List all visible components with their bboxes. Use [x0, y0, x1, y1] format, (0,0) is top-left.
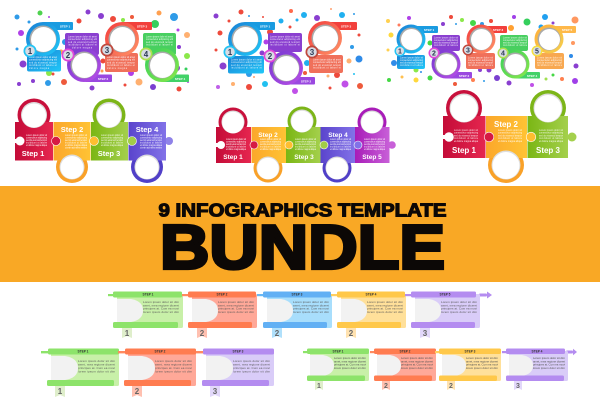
ribbon: step 3: lorem ipsum dolor sit dim — [233, 370, 271, 374]
ribbon: step 3: 2 — [449, 383, 453, 390]
step 2 purple — [428, 35, 472, 78]
piece: step 3: incididunt ut labore — [101, 142, 124, 144]
piece: step 3: et dolore magna aliqua — [101, 144, 124, 147]
step 3 red — [462, 24, 507, 69]
ribbon: step 4: STEP 4 — [366, 293, 377, 297]
ribbon: step 1: principes at. Cum ea movi — [334, 363, 366, 367]
piece: step 3: Step 3 — [536, 146, 561, 155]
ribbon: step 3: 3 — [213, 387, 218, 396]
ribbon: step 2: lorem ipsum dolor sit dim — [401, 366, 434, 370]
ribbon: step 5 with arrow: 3 — [423, 329, 428, 338]
step 2 purple: incididunt ut labore et — [270, 44, 300, 47]
piece: step 3 — [90, 98, 128, 160]
piece: step 3: consectetur adipiscing — [295, 140, 317, 144]
piece: step 4 — [320, 127, 355, 182]
piece: step 1 — [216, 108, 251, 163]
step 1 blue: consectetur adipiscing elit — [29, 59, 57, 62]
step 4 green — [498, 35, 540, 78]
ribbon: step 1: STEP 1 — [333, 349, 344, 353]
piece: step 5: incididunt ut labore — [364, 146, 386, 148]
piece: step 1: Step 1 — [452, 146, 477, 155]
piece: step 3: consectetur adipiscing — [539, 132, 564, 135]
ribbon: step 3: STEP 3 — [233, 350, 244, 354]
ribbon: step 4: 2 — [349, 329, 354, 338]
step 3 red: STEP 3 — [341, 24, 351, 28]
ribbon: step 2 — [182, 292, 257, 338]
ribbon: step 2: Lorem ipsum dolor sit dim — [155, 359, 193, 363]
step 1 blue — [24, 22, 73, 72]
step 2 purple: STEP 2 — [98, 77, 108, 81]
step 5 orange: STEP 5 — [562, 28, 572, 32]
step 5 orange — [532, 24, 576, 69]
step 1 blue: consectetur adipiscing elit — [231, 61, 262, 64]
ribbon: step 5 with arrow: STEP 5 — [440, 293, 451, 297]
ribbon: step 4 with arrow: 3 — [516, 383, 520, 390]
piece: step 2: et dolore magna aliqua — [260, 148, 282, 151]
step 1 blue: incididunt ut labore et — [29, 64, 57, 67]
panel: puzzle with 5 steps — [216, 106, 396, 182]
ribbon: step 2: Lorem ipsum dolor sit dim — [218, 300, 255, 304]
piece: step 2: et dolore magna aliqua — [65, 144, 88, 147]
ribbon: step 4: Lorem ipsum dolor sit dim — [367, 300, 404, 304]
ribbon: step 2: STEP 2 — [400, 349, 411, 353]
ribbon: step 1 — [108, 292, 183, 338]
piece: step 2: consectetur adipiscing — [260, 140, 282, 144]
confetti dots — [214, 8, 363, 94]
piece: step 3: Step 3 — [294, 154, 314, 161]
piece: step 5 — [354, 108, 396, 163]
ribbon: step 3: principes at. Cum ea movi — [233, 366, 270, 370]
ribbon: step 1: STEP 1 — [143, 293, 154, 297]
step 5 orange: 5 — [535, 48, 539, 56]
step 2 purple: incididunt ut labore — [434, 44, 459, 47]
step 1 blue: sed do eiusmod tempor — [231, 64, 262, 67]
piece: step 2: incididunt ut labore — [498, 137, 523, 140]
piece: step 2: et dolore magna aliqua — [498, 140, 523, 143]
piece: step 2: Step 2 — [258, 132, 278, 139]
piece: step 2: incididunt ut labore — [260, 146, 282, 148]
piece: step 1: Step 1 — [22, 149, 44, 158]
step 1 blue: STEP 1 — [424, 28, 434, 32]
step 2 purple: Lorem ipsum dolor sit amet — [68, 36, 97, 38]
piece: step 1 — [443, 90, 486, 158]
step 1 blue — [224, 22, 275, 74]
ribbon: step 1: STEP 1 — [78, 350, 89, 354]
step 5 orange: sed do eiusmod tempor — [537, 62, 562, 64]
piece: step 3: sed do eiusmod tempor — [101, 139, 123, 142]
piece: step 4: incididunt ut labore — [140, 142, 163, 144]
ribbon: step 3 — [257, 292, 332, 338]
piece: step 3: Lorem ipsum dolor sit — [539, 129, 563, 132]
piece: step 4 — [128, 122, 173, 183]
step 3 red — [306, 21, 357, 73]
ribbon: step 3: amet, mea regione diceret — [233, 362, 270, 366]
piece: step 2 — [250, 127, 286, 182]
ribbon: step 3: principes at. Cum ea movi — [466, 363, 498, 367]
ribbon: step 4: principes at. Cum ea movi — [367, 307, 403, 311]
step 4 green: sed do eiusmod tempor — [146, 41, 173, 44]
step 1 blue: Lorem ipsum dolor sit amet — [29, 56, 57, 59]
panel: ribbon row with 3 steps — [41, 348, 274, 397]
step 1 blue: 1 — [228, 48, 233, 57]
piece: step 4: ut enim ad minim veniam — [140, 146, 162, 150]
step 2 purple: STEP 2 — [459, 74, 469, 78]
piece: step 1: sed do eiusmod tempor — [26, 139, 47, 142]
panel: puzzle with 4 steps — [15, 98, 173, 183]
piece: step 4: et dolore magna aliqua — [140, 144, 163, 147]
piece: step 4: sed do eiusmod tempor — [330, 143, 351, 146]
piece: step 1: Lorem ipsum dolor sit — [26, 134, 47, 137]
ribbon: step 3 — [435, 348, 501, 390]
piece: step 1: incididunt ut labore — [454, 137, 479, 140]
orange banner — [0, 186, 600, 282]
piece: step 5: sed do eiusmod tempor — [364, 143, 385, 146]
piece: step 2: consectetur adipiscing — [65, 136, 88, 140]
piece: step 2: Step 2 — [61, 125, 83, 134]
piece: step 2: sed do eiusmod tempor — [498, 134, 522, 137]
piece: step 5: consectetur adipiscing — [364, 140, 386, 144]
step 2 purple: consectetur adipiscing elit — [270, 38, 300, 41]
step 2 purple: 2 — [268, 52, 273, 61]
panel: circle infographic with 5 steps — [386, 14, 578, 87]
ribbon: step 5 with arrow — [405, 292, 492, 338]
piece: step 2: Lorem ipsum dolor sit — [65, 134, 87, 137]
ribbon: step 1: amet, mea regione diceret — [334, 359, 366, 363]
ribbon: step 4 — [331, 292, 406, 338]
piece: step 3: et dolore magna aliqua — [539, 140, 564, 143]
confetti dots — [14, 10, 190, 92]
piece: step 1: sed do eiusmod tempor — [454, 134, 478, 137]
piece: step 2: Lorem ipsum dolor sit — [260, 138, 281, 141]
piece: step 2: sed do eiusmod tempor — [65, 139, 87, 142]
ribbon: step 2: 2 — [384, 383, 388, 390]
step 2 purple: sed do eiusmod tempor — [68, 41, 97, 44]
step 4 green: STEP 4 — [175, 77, 185, 81]
ribbon: step 4 with arrow: amet, mea regione diceret — [533, 359, 565, 363]
ribbon: step 1: amet, mea regione diceret — [78, 362, 115, 366]
ribbon: step 2 — [118, 348, 196, 397]
ribbon: step 3: STEP 3 — [292, 293, 303, 297]
piece: step 3: Lorem ipsum dolor sit — [101, 134, 123, 137]
ribbon: step 4: amet, mea regione diceret — [367, 303, 403, 307]
ribbon: step 1: lorem ipsum dolor sit dim — [143, 310, 180, 314]
step 4 green: incididunt ut labore et — [146, 44, 173, 47]
ribbon: step 3: principes at. Cum ea movi — [293, 307, 329, 311]
piece: step 1: consectetur adipiscing — [454, 132, 479, 135]
step 5 orange: incididunt ut labore — [537, 64, 563, 67]
ribbon: step 3: amet, mea regione diceret — [293, 303, 329, 307]
ribbon: step 2: 2 — [135, 387, 140, 396]
step 3 red: sed do eiusmod tempor — [107, 61, 135, 64]
step 3 red: consectetur adipiscing elit — [313, 61, 341, 64]
step 1 blue: dolore magna — [29, 67, 50, 70]
ribbon: step 2: 2 — [200, 329, 205, 338]
ribbon: step 4 with arrow: principes at. Cum ea movi — [533, 363, 565, 367]
step 3 red: dolore magna — [107, 67, 128, 70]
step 2 purple: 2 — [66, 51, 71, 60]
piece: step 2: consectetur adipiscing — [498, 132, 523, 135]
step 2 purple — [264, 33, 315, 85]
step 1 blue: STEP 1 — [60, 24, 70, 28]
panel: ribbon row with 5 steps — [108, 292, 492, 338]
piece: step 1: consectetur adipiscing — [26, 136, 48, 140]
ribbon: step 3: amet, mea regione diceret — [466, 359, 498, 363]
step 2 purple: 2 — [432, 50, 436, 58]
ribbon: step 4: lorem ipsum dolor sit dim — [367, 310, 404, 314]
step 3 red: sed do eiusmod tempor — [313, 64, 341, 67]
piece: step 2 — [484, 116, 527, 183]
step 3 red: 3 — [105, 46, 110, 55]
piece: step 2: sed do eiusmod tempor — [260, 143, 281, 146]
confetti dots — [386, 14, 578, 87]
ribbon: step 5 with arrow: principes at. Cum ea movi — [441, 307, 477, 311]
piece: step 4: Lorem ipsum dolor sit — [140, 134, 162, 137]
step 1 blue: Lorem ipsum dolor sit amet — [231, 58, 262, 62]
step 3 red: STEP 3 — [137, 24, 147, 28]
step 1 blue: incididunt ut labore — [400, 64, 424, 67]
panel: ribbon row with 4 steps — [303, 348, 577, 390]
ribbon: step 1: principes at. Cum ea movi — [78, 366, 115, 370]
ribbon: step 3: Lorem ipsum dolor sit dim — [293, 300, 330, 304]
piece: step 3: sed do eiusmod tempor — [539, 134, 563, 137]
step 2 purple: sed do eiusmod tempor — [270, 41, 300, 44]
ribbon: step 3 — [196, 348, 274, 397]
piece: step 4: incididunt ut labore — [330, 146, 352, 148]
ribbon: step 1: principes at. Cum ea movi — [143, 307, 179, 311]
subtitle: 9 infographics template: 9 INFOGRAPHICS TEMPLATE — [158, 200, 446, 220]
ribbon: step 1: lorem ipsum dolor sit dim — [78, 370, 116, 374]
piece: step 1: Lorem ipsum dolor sit — [226, 138, 246, 141]
ribbon: step 2: principes at. Cum ea movi — [218, 307, 254, 311]
piece: step 2: ut enim ad minim veniam — [65, 146, 87, 150]
piece: step 4: et dolore magna aliqua — [330, 148, 352, 151]
step 2 purple: sed do eiusmod tempor — [434, 42, 458, 44]
step 3 red: incididunt ut labore — [468, 64, 494, 67]
piece: step 4: consectetur adipiscing — [140, 136, 163, 140]
step 1 blue: sed do eiusmod tempor — [400, 62, 423, 64]
step 4 green: STEP 4 — [527, 74, 537, 78]
ribbon: step 1: 1 — [317, 383, 321, 390]
step 1 blue: Lorem ipsum dolor sit — [400, 56, 423, 60]
step 4 green: Lorem ipsum dolor sit amet — [146, 36, 173, 38]
piece: step 5: Step 5 — [362, 154, 382, 161]
step 1 blue — [394, 24, 438, 69]
step 3 red: 3 — [466, 48, 470, 54]
piece: step 3: consectetur adipiscing — [101, 136, 124, 140]
ribbon: step 1: Lorem ipsum dolor sit dim — [334, 356, 367, 360]
ribbon: step 1 — [41, 348, 119, 397]
step 1 blue: 1 — [398, 48, 402, 56]
ribbon: step 4 with arrow: Lorem ipsum dolor sit dim — [533, 356, 566, 360]
panel: circle infographic with 4 steps — [14, 10, 190, 92]
ribbon: step 4 with arrow: STEP 4 — [532, 349, 543, 353]
ribbon: step 2: lorem ipsum dolor sit dim — [155, 370, 193, 374]
step 1 blue: sed do eiusmod tempor — [29, 61, 57, 64]
piece: step 1: et dolore magna aliqua — [454, 140, 479, 143]
panel: circle infographic with 3 steps — [214, 8, 363, 94]
piece: step 3: sed do eiusmod tempor — [295, 143, 316, 146]
ribbon: step 4 with arrow — [502, 348, 577, 390]
piece: step 3: et dolore magna aliqua — [295, 148, 317, 151]
piece: step 2: Lorem ipsum dolor sit — [498, 129, 522, 132]
step 4 green: consectetur adipiscing — [503, 39, 528, 42]
piece: step 4: Lorem ipsum dolor sit — [330, 138, 351, 141]
ribbon: step 1: Lorem ipsum dolor sit dim — [78, 359, 116, 363]
step 3 red: consectetur adipiscing — [468, 59, 494, 62]
ribbon: step 5 with arrow: lorem ipsum dolor sit dim — [441, 310, 478, 314]
piece: step 1: sed do eiusmod tempor — [226, 143, 246, 146]
ribbon: step 2: lorem ipsum dolor sit dim — [218, 310, 255, 314]
step 4 green: 4 — [144, 50, 149, 59]
step 3 red: Lorem ipsum dolor sit amet — [313, 58, 341, 62]
ribbon: step 2: Lorem ipsum dolor sit dim — [401, 356, 434, 360]
ribbon: step 3: Lorem ipsum dolor sit dim — [233, 359, 271, 363]
ribbon: step 3: 2 — [275, 329, 280, 338]
ribbon: step 1: 1 — [125, 329, 130, 338]
ribbon: step 3: STEP 3 — [465, 349, 476, 353]
ribbon: step 2: principes at. Cum ea movi — [155, 366, 192, 370]
step 2 purple: Lorem ipsum dolor sit — [434, 36, 458, 40]
ribbon: step 2: principes at. Cum ea movi — [401, 363, 433, 367]
ribbon: step 3: lorem ipsum dolor sit dim — [293, 310, 330, 314]
step 4 green: Lorem ipsum dolor sit — [503, 36, 527, 40]
step 3 red — [100, 22, 152, 72]
ribbon: step 2: STEP 2 — [217, 293, 228, 297]
step 2 purple: consectetur adipiscing — [434, 39, 459, 42]
ribbon: step 2: amet, mea regione diceret — [155, 362, 192, 366]
ribbon: step 3: lorem ipsum dolor sit dim — [466, 366, 499, 370]
step 1 blue: 1 — [28, 47, 33, 56]
piece: step 1: Step 1 — [223, 154, 243, 161]
ribbon: step 5 with arrow: amet, mea regione diceret — [441, 303, 477, 307]
ribbon: step 1: amet, mea regione diceret — [143, 303, 179, 307]
piece: step 4: consectetur adipiscing — [330, 140, 352, 144]
step 4 green: 4 — [501, 50, 505, 58]
step 1 blue: incididunt ut labore et — [231, 67, 262, 70]
step 4 green — [140, 33, 189, 82]
piece: step 1: consectetur adipiscing — [226, 140, 247, 144]
step 3 red: incididunt ut labore et — [107, 64, 135, 67]
ribbon: step 4 with arrow: lorem ipsum dolor sit dim — [533, 366, 566, 370]
step 2 purple: dolore magna — [72, 46, 93, 49]
piece: step 2: Step 2 — [494, 120, 519, 129]
step 3 red: consectetur adipiscing elit — [107, 59, 135, 62]
piece: step 2: incididunt ut labore — [65, 142, 88, 144]
step 2 purple: STEP 2 — [301, 80, 311, 84]
piece: step 3: Lorem ipsum dolor sit — [295, 138, 316, 141]
piece: step 3: incididunt ut labore — [295, 146, 317, 148]
step 3 red: 3 — [310, 48, 315, 57]
step 3 red: Lorem ipsum dolor sit — [468, 56, 493, 60]
piece: step 1: incididunt ut labore — [26, 142, 48, 144]
step 1 blue: STEP 1 — [260, 24, 270, 28]
step 4 green: consectetur adipiscing elit — [146, 38, 173, 41]
ribbon: step 1: 1 — [58, 387, 63, 396]
piece: step 5: Lorem ipsum dolor sit — [364, 138, 385, 141]
piece: step 1: Lorem ipsum dolor sit — [454, 129, 478, 132]
title: bundle: BUNDLE — [160, 214, 445, 282]
step 2 purple: Lorem ipsum dolor sit amet — [270, 36, 300, 38]
step 1 blue: consectetur adipiscing — [400, 59, 424, 62]
step 3 red: incididunt ut labore et — [313, 67, 341, 70]
ribbon: step 3: Lorem ipsum dolor sit dim — [466, 356, 499, 360]
panel: puzzle with 3 steps — [443, 90, 576, 183]
ribbon: step 1: Lorem ipsum dolor sit dim — [143, 300, 180, 304]
piece: step 4: sed do eiusmod tempor — [140, 139, 162, 142]
step 5 orange: consectetur adipiscing — [537, 59, 563, 62]
ribbon: step 2 — [370, 348, 436, 390]
step 3 red: Lorem ipsum dolor sit amet — [107, 56, 135, 59]
step 4 green: sed do eiusmod tempor — [503, 42, 527, 44]
step 2 purple — [62, 33, 112, 82]
piece: step 5: et dolore magna aliqua — [364, 148, 386, 151]
ribbon: step 2: amet, mea regione diceret — [218, 303, 254, 307]
piece: step 3: incididunt ut labore — [539, 137, 564, 140]
piece: step 1: incididunt ut labore — [226, 146, 247, 148]
ribbon: step 2: STEP 2 — [155, 350, 166, 354]
ribbon: step 1: lorem ipsum dolor sit dim — [334, 366, 367, 370]
piece: step 1 — [15, 98, 53, 160]
piece: step 1: et dolore magna aliqua — [26, 144, 48, 147]
step 3 red: sed do eiusmod tempor — [468, 62, 493, 64]
piece: step 4: Step 4 — [136, 125, 159, 134]
piece: step 3 — [285, 106, 320, 163]
step 3 red: STEP 3 — [493, 28, 503, 32]
step 2 purple: consectetur adipiscing elit — [68, 38, 97, 41]
step 2 purple: incididunt ut labore et — [68, 44, 97, 47]
step 4 green: incididunt ut labore — [503, 44, 528, 47]
ribbon: step 2: amet, mea regione diceret — [401, 359, 433, 363]
ribbon: step 1 — [303, 348, 369, 390]
piece: step 4: Step 4 — [328, 132, 348, 139]
piece: step 3: Step 3 — [98, 149, 120, 158]
ribbon: step 5 with arrow: Lorem ipsum dolor sit dim — [441, 300, 478, 304]
piece: step 3 — [526, 90, 576, 158]
piece: step 1: et dolore magna aliqua — [226, 148, 247, 151]
step 5 orange: Lorem ipsum dolor sit — [537, 56, 562, 60]
piece: step 2 — [52, 122, 90, 183]
